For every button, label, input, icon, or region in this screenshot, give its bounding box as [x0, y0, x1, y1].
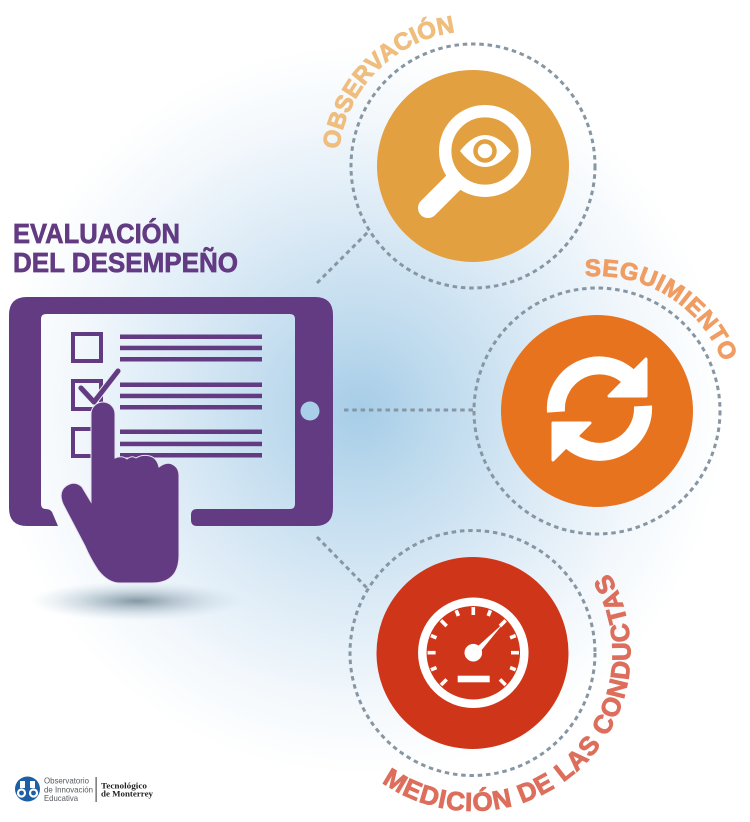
panel: medición de las conductas [348, 529, 632, 812]
dashed ring [351, 44, 595, 288]
checklist row 3 [71, 427, 262, 458]
observatorio wordmark: Observatorio [44, 776, 89, 786]
observatorio wordmark: Educativa [44, 793, 78, 803]
checklist row 2 [71, 379, 262, 411]
connector: tablet to seguimiento [344, 408, 475, 412]
icon: magnifier with eye [428, 111, 525, 208]
divider [96, 777, 97, 802]
logo: Observatorio de Innovación Educativa, Tecnológico de Monterrey [15, 776, 153, 803]
pointing hand [61, 402, 179, 583]
icon: speedometer [422, 602, 524, 704]
tecnológico wordmark: Tecnológico [101, 782, 147, 790]
label: MEDICIÓN DE LAS CONDUCTAS [382, 575, 632, 812]
hand shadow [29, 581, 245, 621]
check mark [81, 371, 118, 402]
label: OBSERVACIÓN [323, 16, 454, 148]
disc [376, 557, 568, 749]
tecnológico wordmark [101, 782, 153, 798]
tablet illustration [9, 297, 333, 583]
connector: tablet to observación [317, 232, 368, 283]
label: SEGUIMIENTO [585, 258, 736, 359]
home button [300, 402, 320, 420]
disc [377, 70, 569, 262]
checklist row 1 [71, 332, 262, 363]
icon: refresh arrows [553, 359, 646, 460]
title: EVALUACIÓN [13, 218, 180, 249]
panel: observación [323, 16, 596, 290]
title: DEL DESEMPEÑO [13, 247, 238, 278]
dashed ring [350, 530, 595, 776]
dashed ring [474, 288, 720, 534]
tablet frame [9, 297, 333, 526]
panel: seguimiento [472, 258, 736, 536]
connector: tablet to medición [317, 537, 367, 588]
tecnológico wordmark: de Monterrey [101, 790, 153, 798]
observatorio wordmark [44, 776, 93, 803]
disc [501, 315, 693, 507]
icon: binoculars [15, 776, 40, 802]
title [13, 218, 238, 278]
observatorio wordmark: de Innovación [44, 784, 93, 794]
